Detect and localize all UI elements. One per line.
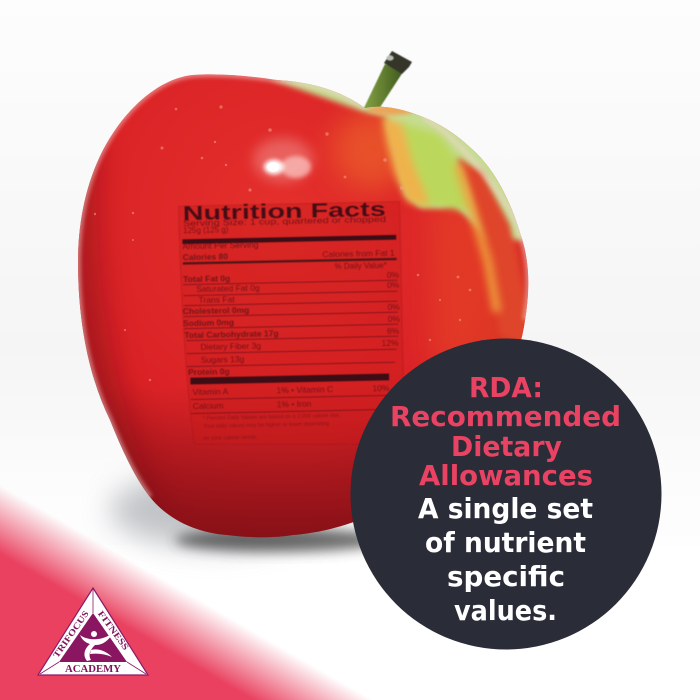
nutrition facts label: 0% bbox=[387, 302, 400, 312]
left dark edge bbox=[78, 149, 162, 509]
logo triangle bbox=[38, 588, 148, 675]
big green area bbox=[270, 70, 540, 240]
callout body: A single set bbox=[418, 493, 593, 525]
nutrition facts label: % Daily Value* bbox=[334, 261, 387, 271]
nutrition facts label: * Percent Daily Values are based on a 2,000 calorie diet. bbox=[203, 413, 341, 422]
callout body: specific bbox=[447, 561, 565, 593]
skin highlight bbox=[253, 138, 313, 182]
nutrition facts label: 1% • Iron bbox=[277, 399, 312, 409]
nutrition facts label: 125g (125 g) bbox=[183, 225, 229, 235]
nutrition facts label: Calcium bbox=[193, 400, 224, 411]
nutrition facts label: Trans Fat bbox=[198, 294, 235, 305]
red wedge bbox=[457, 157, 530, 345]
nutrition facts label: Saturated Fat 0g bbox=[196, 283, 260, 294]
nutrition facts label: Vitamin A bbox=[192, 386, 229, 397]
nutrition facts label: Dietary Fiber 3g bbox=[200, 341, 261, 352]
nutrition facts label: Protein 0g bbox=[188, 366, 230, 377]
serving size: Serving Size: 1 cup, quartered or chopped bbox=[183, 215, 386, 228]
logo text bbox=[51, 609, 131, 675]
yellow streak bbox=[458, 165, 497, 312]
nutrition facts label: Total Carbohydrate 17g bbox=[184, 328, 279, 340]
nutrition facts label: 0% bbox=[388, 314, 401, 324]
nutrition facts label: Sodium 0mg bbox=[183, 317, 234, 328]
callout body: values. bbox=[454, 595, 557, 627]
callout body: of nutrient bbox=[425, 527, 586, 559]
orange wash near stem bbox=[332, 110, 412, 190]
logo text: ACADEMY bbox=[65, 664, 122, 675]
nutrition facts label: Calories from Fat 1 bbox=[322, 248, 395, 259]
callout heading: Dietary bbox=[451, 431, 562, 463]
pink corner band bbox=[0, 470, 400, 700]
skin speckles bbox=[94, 105, 471, 381]
callout heading: Allowances bbox=[419, 460, 593, 492]
green patch bbox=[400, 122, 474, 212]
apple bbox=[78, 50, 528, 538]
yellow blush bbox=[382, 116, 430, 206]
logo text: FITNESS bbox=[96, 609, 131, 652]
nutrition facts label: Sugars 13g bbox=[201, 354, 245, 365]
nutrition facts label: 1% • Vitamin C bbox=[276, 384, 333, 395]
nutrition facts label: Total Fat 0g bbox=[183, 273, 230, 284]
nutrition facts label: 12% bbox=[381, 338, 399, 348]
white floor area bbox=[0, 545, 700, 700]
callout heading: RDA: bbox=[469, 372, 543, 404]
bottom dark edge bbox=[114, 402, 372, 538]
callout body bbox=[418, 493, 593, 627]
callout heading: Recommended bbox=[390, 401, 621, 433]
callout circle bbox=[350, 338, 662, 650]
nutrition facts label: 0% bbox=[387, 280, 400, 290]
nutrition facts label: on your calorie needs. bbox=[203, 435, 258, 442]
logo text: TRIFOCUS bbox=[51, 609, 91, 660]
logo: Trifocus Fitness Academy bbox=[38, 588, 148, 675]
nutrition facts label: Cholesterol 0mg bbox=[183, 305, 249, 316]
nutrition facts label: 0% bbox=[387, 270, 400, 280]
nutrition facts label: Amount Per Serving bbox=[182, 240, 259, 251]
apple body bbox=[78, 74, 528, 538]
nutrition facts label: 6% bbox=[387, 326, 400, 336]
orange patch near stem bbox=[368, 105, 416, 115]
nutrition facts label: Calories 80 bbox=[183, 251, 228, 262]
pale rim bbox=[78, 74, 528, 497]
nutrition facts label: Your daily values may be higher or lower depending bbox=[203, 421, 329, 430]
apple stem bbox=[362, 51, 412, 112]
nutrition facts label bbox=[179, 199, 405, 448]
nutrition facts label: 10% bbox=[372, 383, 390, 393]
apple shadow bbox=[110, 472, 385, 552]
label title: Nutrition Facts bbox=[183, 199, 386, 225]
orange wash right bbox=[427, 210, 528, 358]
logo figure bbox=[80, 631, 113, 661]
callout heading bbox=[390, 372, 621, 492]
